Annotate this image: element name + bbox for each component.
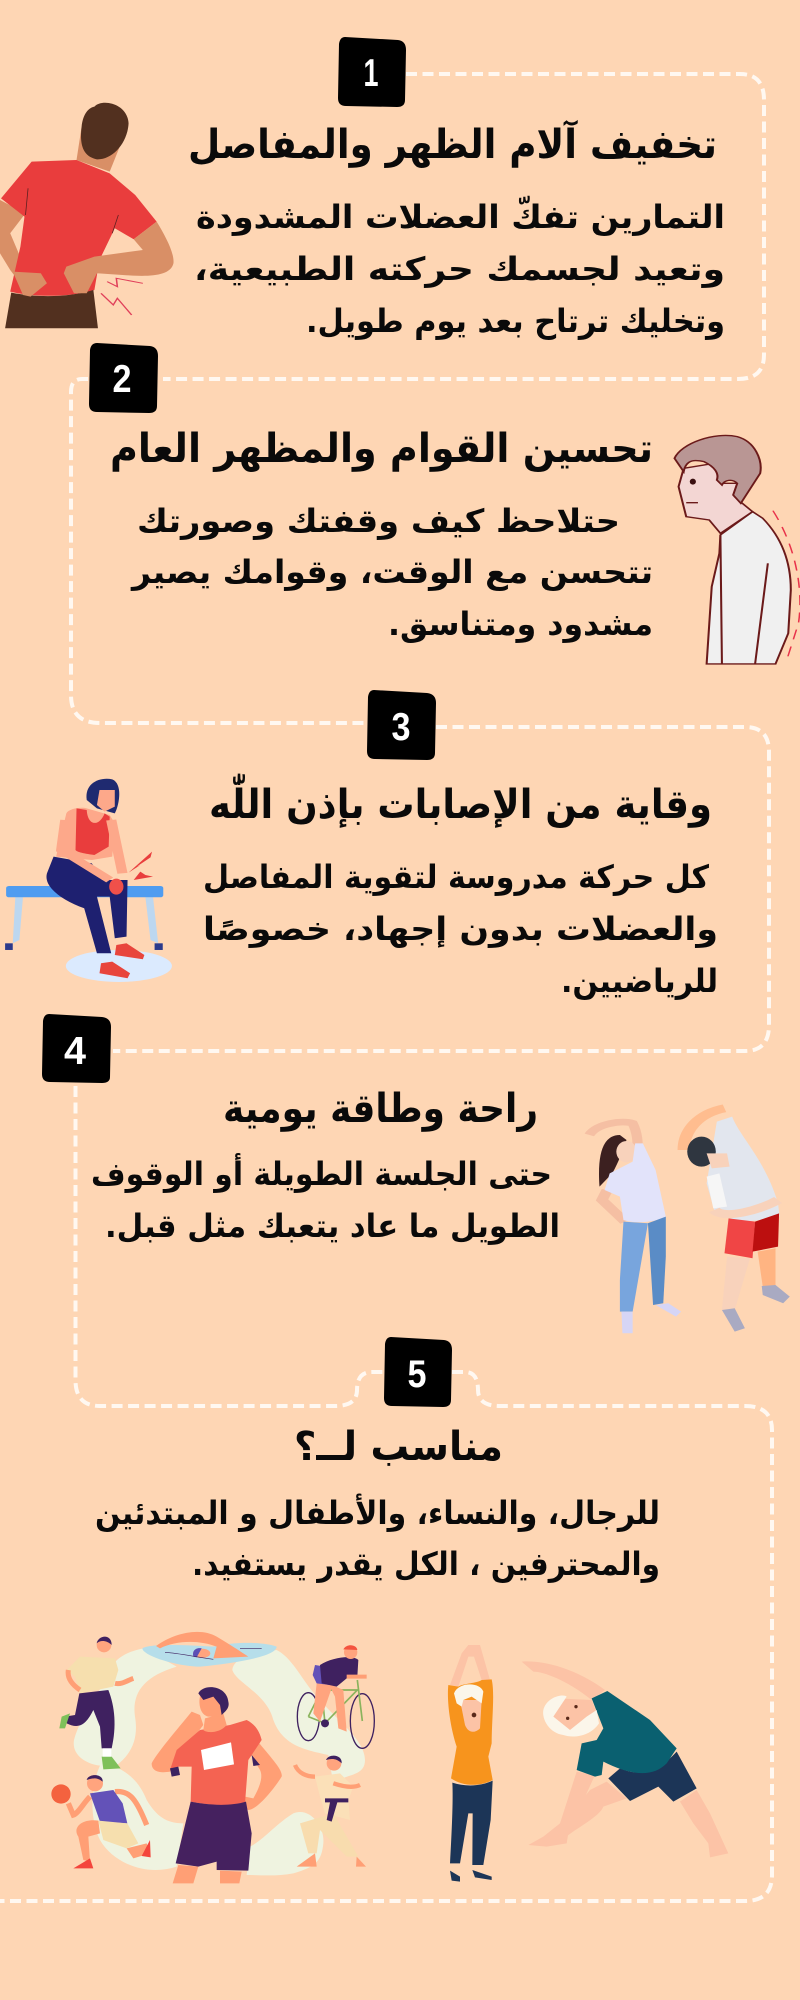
illustration: sports people around a thinking man <box>51 1632 374 1883</box>
body text 1: وتخليك ترتاح بعد يوم طويل. <box>306 302 725 340</box>
panel 1: back and joint pain <box>0 37 725 340</box>
body text 5: للرجال، والنساء، والأطفال و المبتدئين <box>95 1493 660 1532</box>
badge 5: 5 <box>408 1353 426 1396</box>
body text 4: حتى الجلسة الطويلة أو الوقوف <box>91 1153 552 1193</box>
badge 3 <box>367 690 436 760</box>
icon: man with posture curve <box>674 435 800 664</box>
body text 2: تتحسن مع الوقت، وقوامك يصير <box>130 553 653 591</box>
badge 5 <box>384 1337 452 1407</box>
body text 3: والعضلات بدون إجهاد، خصوصًا <box>203 910 718 949</box>
heading 5: مناسب لــ؟ <box>294 1424 503 1470</box>
heading 4: راحة وطاقة يومية <box>223 1086 538 1132</box>
icon: couple stretching <box>589 1108 790 1333</box>
body text 5 <box>95 1493 660 1583</box>
panel 3: injury prevention <box>5 690 718 1000</box>
body text 4: الطويل ما عاد يتعبك مثل قبل. <box>105 1207 560 1245</box>
illustration: elderly couple stretching <box>448 1645 728 1882</box>
icon: man with back pain <box>0 103 174 328</box>
badge 1: 1 <box>364 52 378 95</box>
badge 1 <box>338 37 406 107</box>
body text 2: حتلاحظ كيف وقفتك وصورتك <box>137 502 620 540</box>
badge 2 <box>89 343 158 413</box>
body text 2 <box>130 502 653 643</box>
body text 3 <box>203 858 718 1000</box>
badge 2: 2 <box>112 358 132 401</box>
badge 4: 4 <box>64 1030 86 1073</box>
body text 1 <box>194 195 725 340</box>
heading 3: وقاية من الإصابات بإذن اللّٰه <box>209 773 712 828</box>
body text 3: كل حركة مدروسة لتقوية المفاصل <box>203 858 709 896</box>
panel 4: daily comfort and energy <box>42 1014 790 1333</box>
badge 4 <box>42 1014 111 1083</box>
badge 3: 3 <box>392 706 410 749</box>
panel 2: posture <box>89 343 800 664</box>
body text 5: والمحترفين ، الكل يقدر يستفيد. <box>192 1545 660 1583</box>
heading 2: تحسين القوام والمظهر العام <box>110 426 653 472</box>
body text 1: وتعيد لجسمك حركته الطبيعية، <box>194 250 725 288</box>
panel 5: suitable for everyone <box>51 1337 728 1883</box>
body text 2: مشدود ومتناسق. <box>388 605 653 643</box>
body text 4 <box>91 1153 560 1245</box>
body text 3: للرياضيين. <box>561 962 718 1000</box>
body text 1: التمارين تفكّ العضلات المشدودة <box>196 195 725 236</box>
icon: woman with knee pain on bench <box>5 779 172 982</box>
heading 1: تخفيف آلام الظهر والمفاصل <box>188 119 717 168</box>
